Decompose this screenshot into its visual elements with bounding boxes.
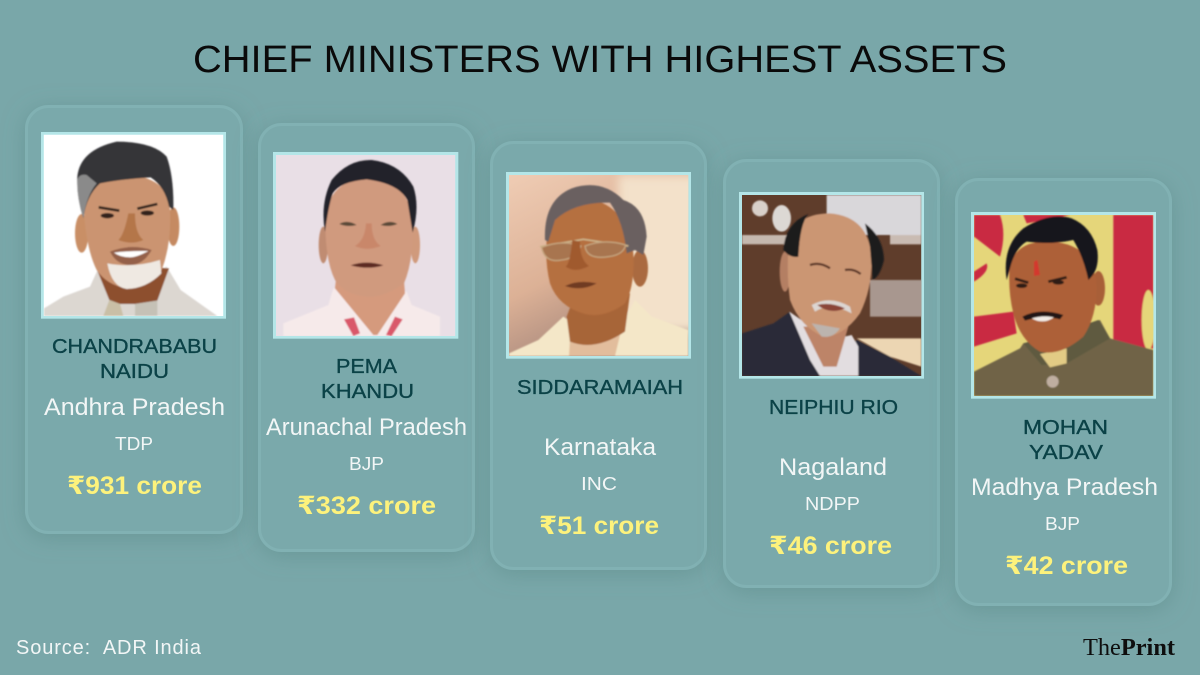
panel: Chandrababu Naidu: NAIDU xyxy=(100,361,169,383)
name: SIDDARAMAIAH xyxy=(517,377,683,399)
assets: ₹332 crore xyxy=(297,492,436,520)
party: BJP xyxy=(1045,514,1080,534)
state: Madhya Pradesh xyxy=(971,474,1158,501)
name: NEIPHIU RIO xyxy=(769,397,898,419)
panel: Pema Khandu: KHANDU xyxy=(321,381,414,403)
state: Arunachal Pradesh xyxy=(266,414,467,441)
panel: Pema Khandu xyxy=(260,124,474,550)
logo: ThePrint: ThePrint xyxy=(1083,635,1175,661)
name: CHANDRABABU xyxy=(52,336,217,358)
panel: Siddaramaiah xyxy=(492,142,706,568)
photo: Chandrababu Naidu xyxy=(41,132,226,319)
assets: ₹51 crore xyxy=(539,512,659,540)
state: Karnataka xyxy=(544,434,657,461)
party: NDPP xyxy=(805,494,860,514)
panel: Mohan Yadav: YADAV xyxy=(1029,442,1104,464)
state: Nagaland xyxy=(779,454,887,481)
panel: Mohan Yadav xyxy=(956,180,1170,604)
assets: ₹931 crore xyxy=(67,472,202,500)
state: Andhra Pradesh xyxy=(44,394,225,421)
panel: Chandrababu Naidu xyxy=(26,106,242,532)
name: MOHAN xyxy=(1023,417,1108,439)
name: PEMA xyxy=(336,356,398,378)
photo: Neiphiu Rio xyxy=(739,192,924,379)
assets: ₹46 crore xyxy=(769,532,892,560)
party: TDP xyxy=(115,434,153,454)
party: INC xyxy=(581,474,617,494)
photo: Pema Khandu xyxy=(273,152,458,339)
panel: Neiphiu Rio xyxy=(724,160,938,586)
party: BJP xyxy=(349,454,384,474)
photo: Siddaramaiah xyxy=(506,172,698,359)
photo: Mohan Yadav xyxy=(971,212,1156,399)
source: Source: ADR India xyxy=(16,637,202,659)
assets: ₹42 crore xyxy=(1005,552,1128,580)
title: CHIEF MINISTERS WITH HIGHEST ASSETS xyxy=(193,39,1007,81)
